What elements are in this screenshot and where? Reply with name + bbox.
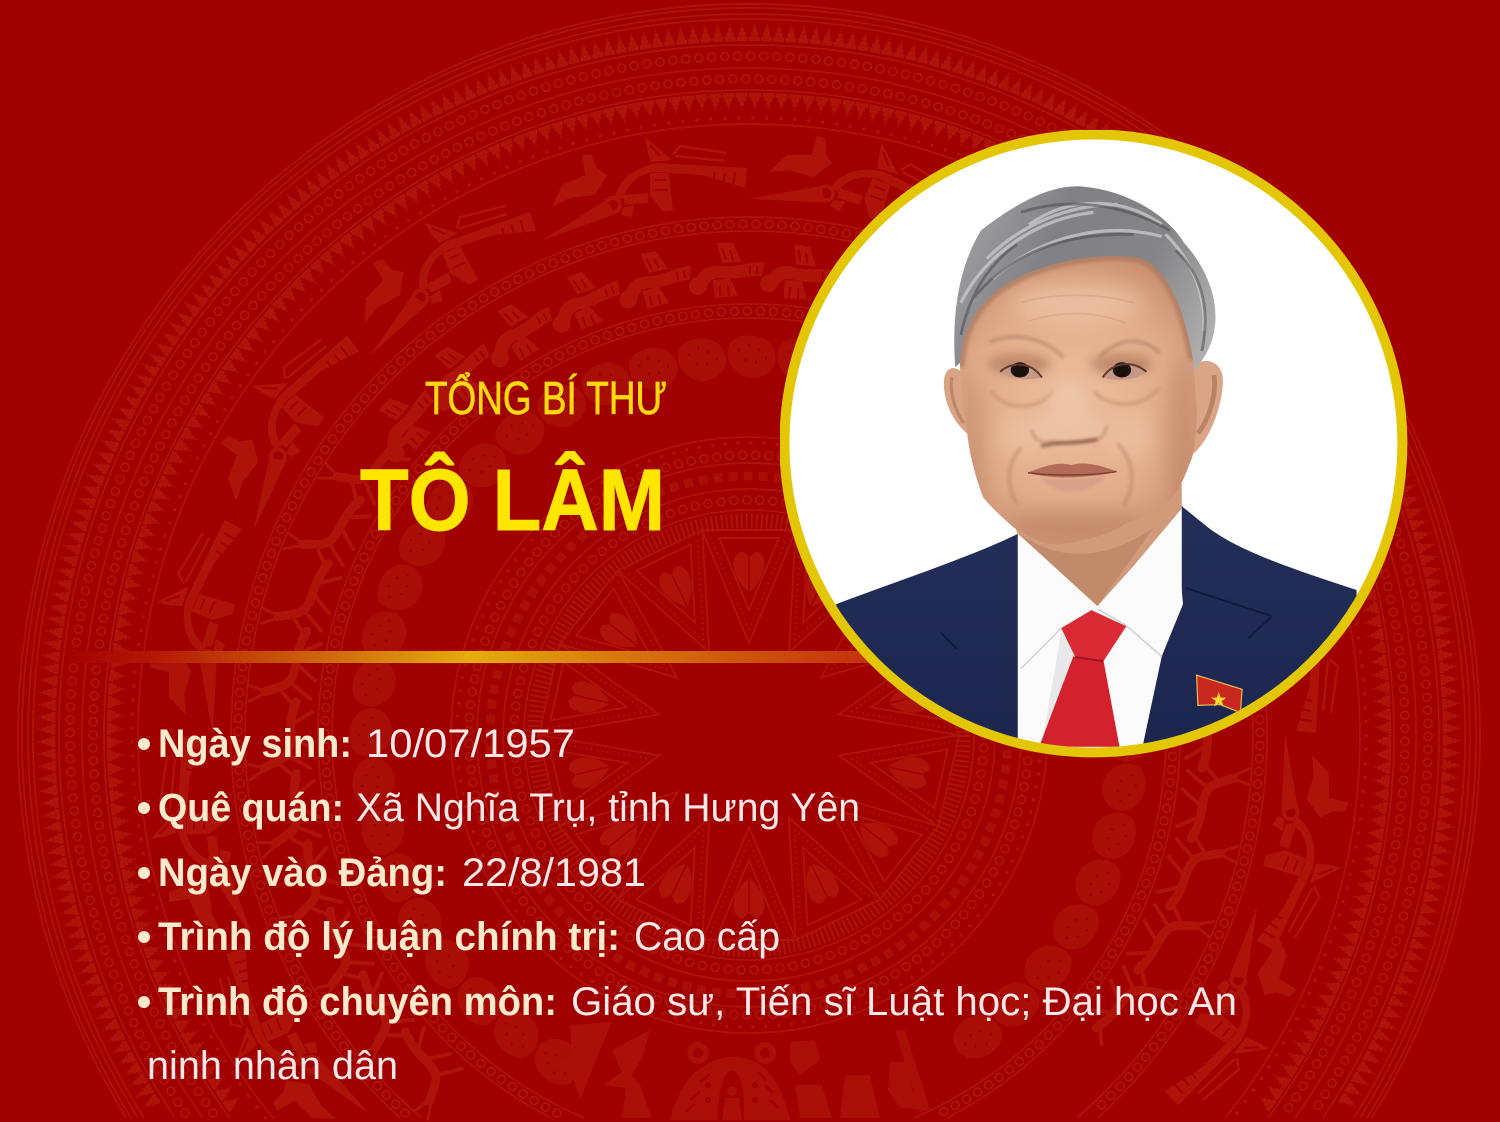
item: hometown: Quê quán: (158, 786, 344, 830)
inner triangle band (109, 95, 1389, 1111)
item: hometown (138, 786, 860, 830)
item: date of birth (138, 722, 575, 766)
forehead lines (1021, 295, 1134, 323)
item: professional level (138, 980, 1237, 1088)
item: hometown: Xã Nghĩa Trụ, tỉnh Hưng Yên (356, 786, 860, 830)
pin badge: ★ (1210, 690, 1228, 712)
gold divider line (70, 651, 870, 663)
eyebrows (990, 337, 1160, 357)
item: political theory level: Trình độ lý luận chính trị: (158, 915, 620, 959)
hairline shadow (960, 256, 1193, 367)
pin badge (1197, 675, 1242, 713)
inner figures band (279, 265, 1219, 1092)
lips (1028, 463, 1117, 477)
item: political theory level: Cao cấp (634, 915, 780, 959)
stilt house with figures at bottom (552, 1022, 930, 1120)
necktie (1039, 610, 1126, 747)
face (960, 256, 1197, 544)
facial features (960, 256, 1198, 542)
title: position: TỔNG BÍ THƯ (425, 372, 667, 424)
item: party admission date (138, 851, 646, 895)
hair (954, 186, 1215, 371)
flying cranes (118, 104, 1380, 1122)
eye sockets (988, 353, 1050, 374)
item: professional level: ninh nhân dân (147, 1044, 398, 1088)
meander band (490, 476, 1008, 994)
central star (539, 530, 959, 940)
info list (138, 722, 1237, 1088)
gold ring (784, 134, 1402, 752)
birds and deer band (159, 171, 1339, 1122)
ears (944, 361, 1223, 453)
heading: name: TÔ LÂM (360, 452, 665, 549)
nose (1050, 383, 1080, 408)
item: date of birth: 10/07/1957 (366, 722, 575, 766)
shirt and collar (1018, 508, 1182, 760)
item: professional level: Giáo sư, Tiến sĩ Luật học; Đại học An (571, 980, 1237, 1024)
eyes (1002, 366, 1041, 380)
suit jacket (836, 500, 1357, 760)
neck (1009, 484, 1182, 606)
eye bags (991, 387, 1160, 406)
item: professional level: Trình độ chuyên môn: (158, 980, 557, 1024)
item: date of birth: Ngày sinh: (158, 722, 352, 766)
item: party admission date: Ngày vào Đảng: (158, 851, 447, 895)
portrait in gold ring (780, 130, 1408, 758)
smile lines (1009, 443, 1132, 506)
item: party admission date: 22/8/1981 (462, 851, 646, 895)
fan band (535, 521, 963, 949)
